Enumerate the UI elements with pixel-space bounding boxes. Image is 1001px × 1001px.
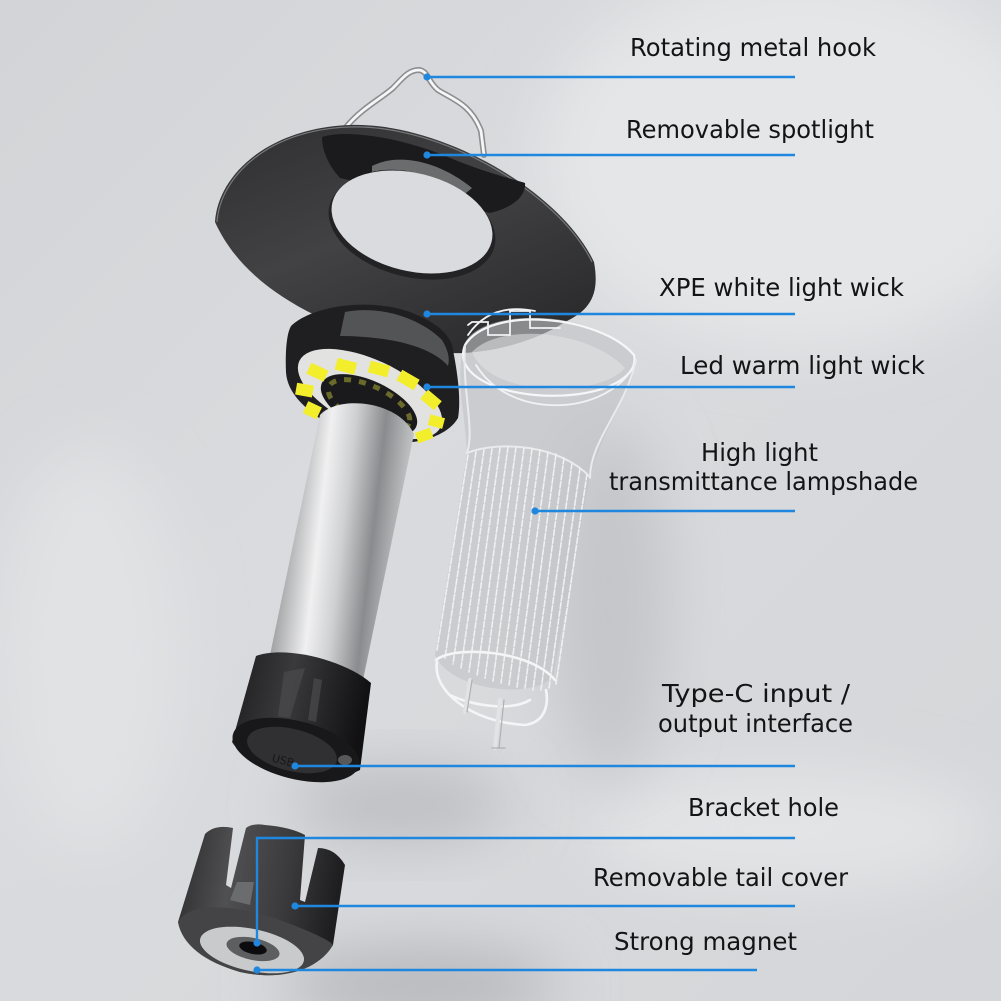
- leader line: strong magnet: [253, 966, 757, 974]
- USB mark: USB: [270, 752, 296, 770]
- label: rotating metal hook: Rotating metal hook: [630, 33, 877, 62]
- label: Type-C interface: Type-C input /: [661, 679, 851, 708]
- leader line: removable tail cover: [291, 902, 795, 910]
- leader line: removable spotlight: [423, 151, 795, 159]
- leader line: lampshade: [531, 507, 795, 515]
- leader line: LED warm light wick: [423, 383, 795, 391]
- leader line: bracket hole: [253, 838, 795, 947]
- label: XPE white light wick: XPE white light wick: [659, 273, 905, 302]
- label: bracket hole: Bracket hole: [688, 793, 839, 822]
- label: lampshade: High light: [701, 438, 818, 467]
- illustration: USB end cap: [226, 652, 371, 794]
- illustration: high light transmittance lampshade: [435, 309, 636, 748]
- label: lampshade: [609, 438, 918, 496]
- LED chips: [295, 358, 445, 443]
- label: Type-C interface: [658, 679, 853, 738]
- label: removable spotlight: Removable spotlight: [626, 115, 874, 144]
- leader line: rotating metal hook: [423, 73, 795, 81]
- label: lampshade: transmittance lampshade: [609, 467, 918, 496]
- leader line: Type-C interface: [291, 762, 795, 770]
- illustration: removable spotlight reflector disc: [215, 125, 596, 353]
- label: removable tail cover: Removable tail cover: [593, 863, 849, 892]
- illustration: removable tail cover: [178, 824, 345, 982]
- leader line: XPE white light wick: [423, 310, 795, 318]
- label: LED warm light wick: Led warm light wick: [680, 351, 926, 380]
- label: strong magnet: Strong magnet: [614, 927, 797, 956]
- illustration: lamp head with LED rings: [285, 305, 459, 458]
- label: Type-C interface: output interface: [658, 709, 853, 738]
- illustration: metal tube body: [270, 403, 414, 680]
- illustration: rotating metal hook: [347, 70, 484, 155]
